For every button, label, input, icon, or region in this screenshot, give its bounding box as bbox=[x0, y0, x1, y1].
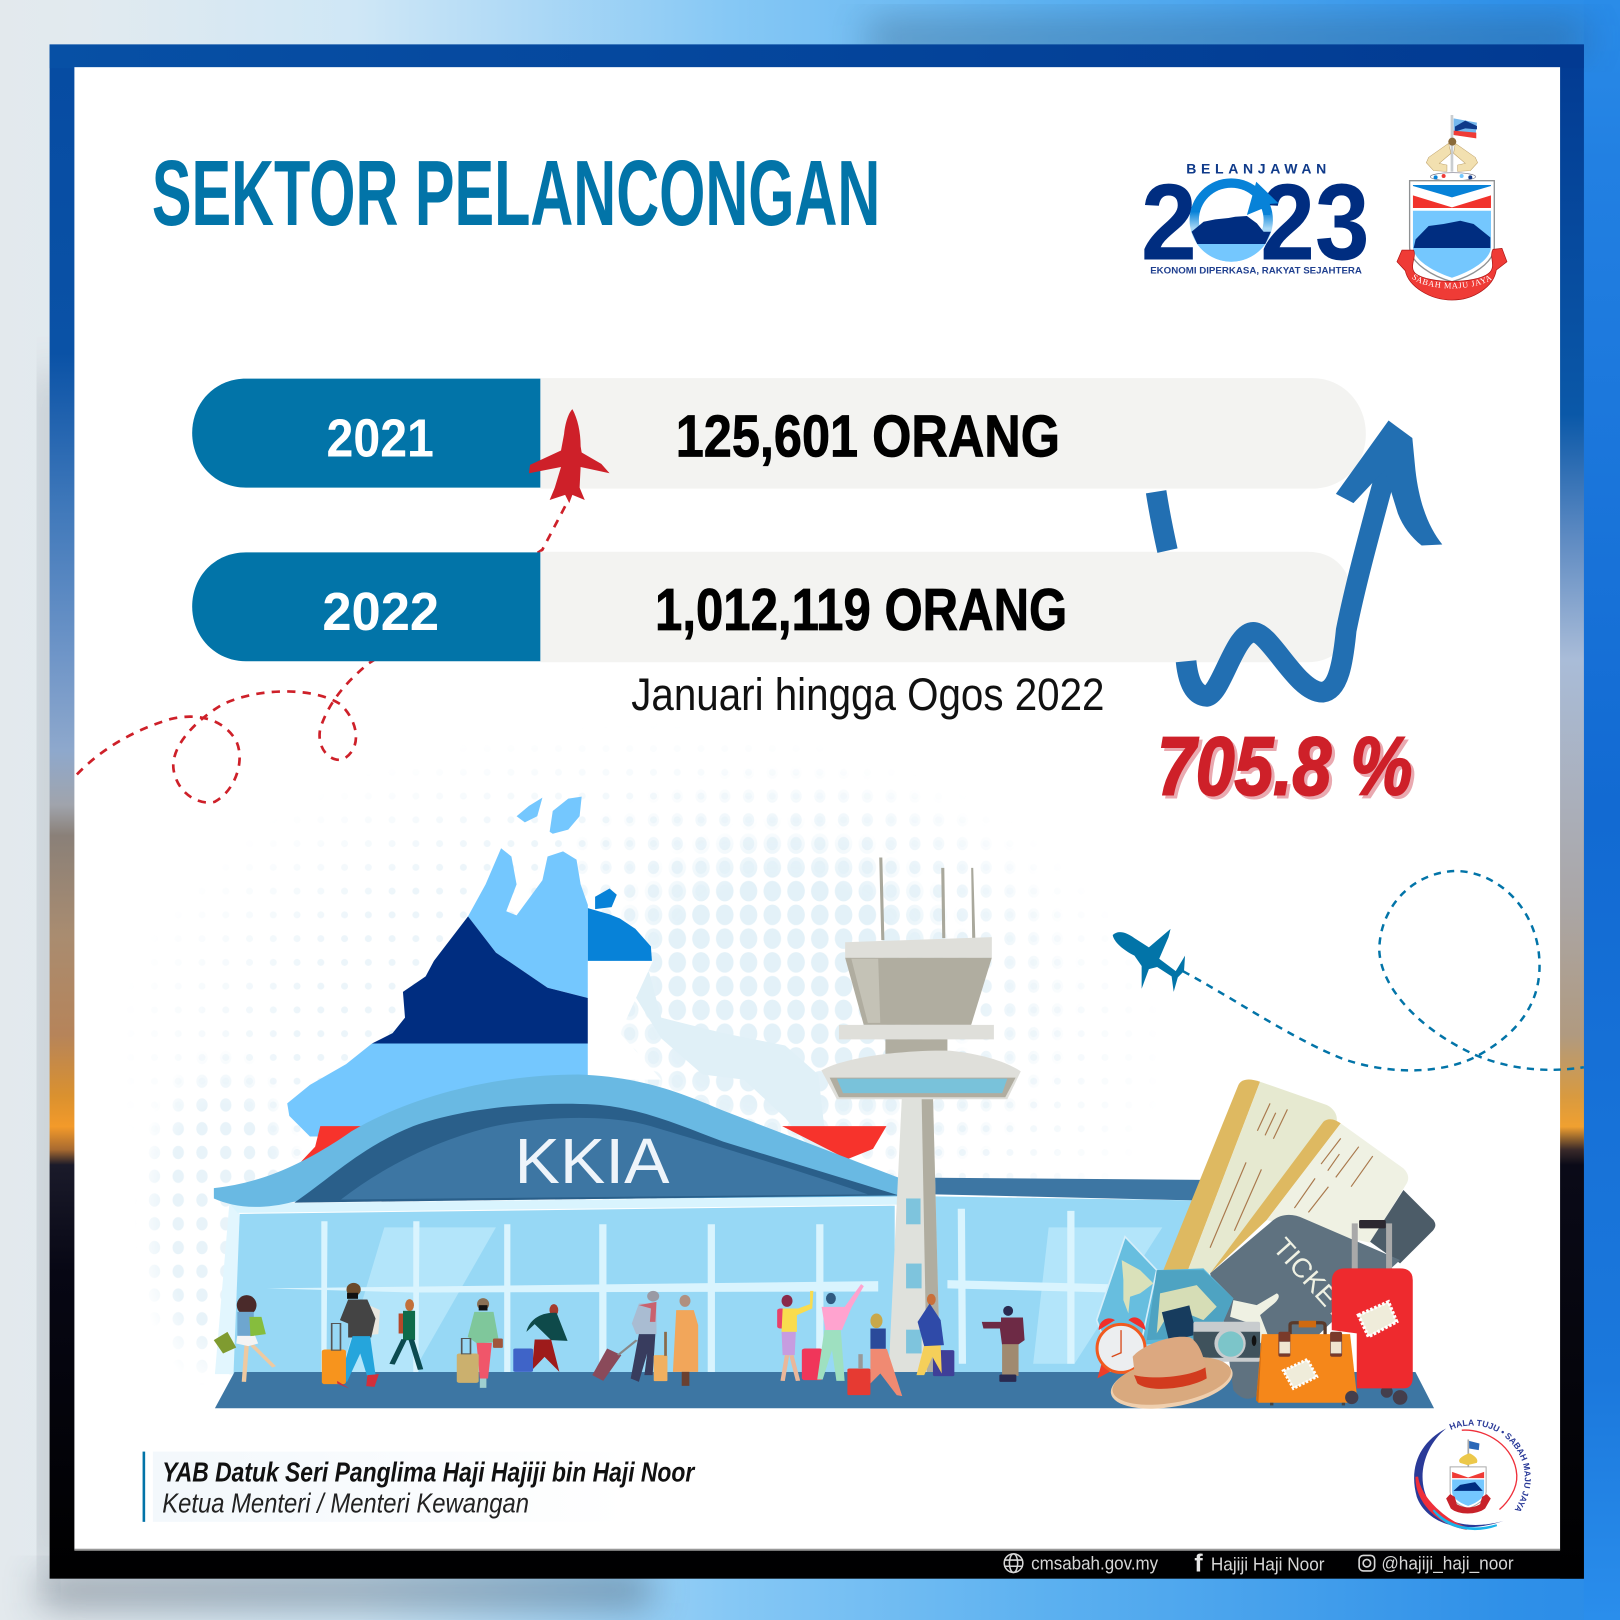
person: woman with beige suitcase bbox=[457, 1298, 503, 1388]
person: woman in orange robe bbox=[654, 1295, 698, 1386]
camera bbox=[1193, 1322, 1260, 1362]
logo: belanjawan 2023: BELANJAWAN bbox=[1186, 161, 1326, 177]
boarding pass two bbox=[1210, 1119, 1408, 1273]
floor bbox=[215, 1372, 1434, 1408]
icon: globe bbox=[1004, 1554, 1023, 1572]
bar: 2021 bbox=[192, 378, 1366, 489]
year 2021: 2021 bbox=[326, 409, 434, 469]
halftone dots background bbox=[149, 771, 1084, 1368]
growth arrow bbox=[1156, 420, 1442, 696]
airport terminal building bbox=[214, 1074, 1204, 1374]
world map folded bbox=[1097, 1237, 1233, 1347]
orange suitcase bbox=[1256, 1321, 1357, 1405]
person: walking woman green bbox=[392, 1299, 421, 1370]
alarm clock bbox=[1097, 1317, 1145, 1378]
control tower bbox=[821, 858, 1021, 1374]
roof sign panel bbox=[341, 1118, 868, 1200]
speaker role: Ketua Menteri / Menteri Kewangan bbox=[162, 1488, 529, 1519]
logo: belanjawan 2023: 2 bbox=[1141, 161, 1197, 282]
red dashed flight path bbox=[76, 506, 565, 803]
blue dashed flight path bbox=[1183, 871, 1584, 1070]
map of sabah bbox=[287, 797, 886, 1167]
person: man with orange suitcase bbox=[322, 1283, 380, 1389]
right wing bbox=[935, 1178, 1204, 1374]
main glass hall bbox=[229, 1206, 895, 1374]
person: man in pink shirt waving bbox=[802, 1284, 864, 1381]
ticket front bbox=[1210, 1215, 1400, 1399]
icon: red plane bbox=[529, 409, 610, 503]
person: man pointing bbox=[982, 1306, 1025, 1382]
kkia sign: KKIA bbox=[515, 1125, 670, 1197]
person: man with blue suitcase bbox=[513, 1304, 568, 1372]
boarding pass one bbox=[1163, 1080, 1337, 1273]
period note: Januari hingga Ogos 2022 bbox=[631, 669, 1104, 720]
percentage: 705.8 % bbox=[1160, 723, 1415, 816]
logo: belanjawan 2023 bbox=[1141, 161, 1370, 282]
person: woman in blue coat bbox=[917, 1294, 954, 1376]
logo: hala tuju sabah maju jaya: HALA TUJU • SABAH MAJU JAYA bbox=[1449, 1420, 1531, 1511]
ticket front: TICKET bbox=[1267, 1232, 1356, 1325]
facebook name: Hajiji Haji Noor bbox=[1211, 1553, 1325, 1574]
travel items: tickets, map, camera, hat, luggage bbox=[1097, 1080, 1435, 1417]
value 2021: 125,601 ORANG bbox=[676, 405, 1060, 470]
icon: facebook: f bbox=[1194, 1550, 1203, 1577]
percentage: 705.8 % bbox=[1157, 720, 1412, 813]
logo: belanjawan 2023: EKONOMI DIPERKASA, RAKYAT SEJAHTERA bbox=[1150, 265, 1362, 275]
travellers bbox=[214, 1283, 1025, 1396]
bar: 2022 bbox=[192, 552, 1353, 662]
logo: sabah crest: SABAH MAJU JAYA bbox=[1412, 274, 1492, 288]
speaker name: YAB Datuk Seri Panglima Haji Hajiji bin Haji Noor bbox=[162, 1457, 696, 1488]
year 2022: 2022 bbox=[322, 582, 439, 642]
logo: hala tuju sabah maju jaya bbox=[1414, 1420, 1531, 1530]
speaker credit bbox=[143, 1452, 696, 1522]
person: elderly man with suitcase bbox=[592, 1291, 659, 1382]
person: woman with shopping bags bbox=[214, 1295, 274, 1382]
sun hat bbox=[1107, 1337, 1237, 1417]
red suitcase bbox=[1332, 1220, 1413, 1405]
roof bbox=[214, 1074, 899, 1207]
footer contact bar bbox=[1004, 1550, 1514, 1577]
title: SEKTOR PELANCONGAN bbox=[152, 141, 880, 245]
person: woman in yellow top waving bbox=[777, 1291, 813, 1381]
icon: blue plane bbox=[1113, 929, 1185, 992]
logo: belanjawan 2023: 23 bbox=[1260, 161, 1370, 282]
logo: sabah crest bbox=[1396, 115, 1508, 300]
person: woman with red suitcase bbox=[847, 1313, 902, 1396]
value 2022: 1,012,119 ORANG bbox=[655, 578, 1067, 643]
ticket dark back bbox=[1370, 1190, 1435, 1263]
instagram handle: @hajiji_haji_noor bbox=[1381, 1552, 1514, 1574]
website: cmsabah.gov.my bbox=[1031, 1552, 1159, 1573]
roof dark band bbox=[294, 1104, 899, 1203]
icon: instagram bbox=[1359, 1555, 1375, 1571]
